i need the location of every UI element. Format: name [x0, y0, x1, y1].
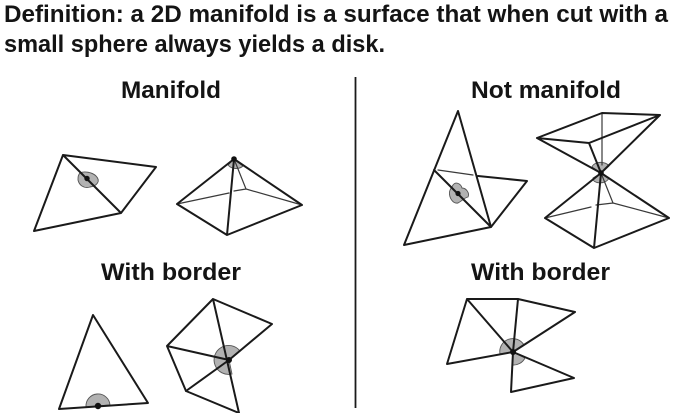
diagram: non-manifold double pyramid: [537, 113, 669, 248]
diagram: border fan mesh: [167, 299, 272, 413]
heading: With border, left: With border: [101, 259, 241, 286]
diagram: manifold flat mesh: [34, 155, 156, 231]
diagram: border non-manifold fan: [447, 299, 575, 392]
diagram: border triangle: [59, 315, 148, 409]
definition text: small sphere always yields a disk.: [4, 31, 385, 58]
definition text: [4, 1, 669, 58]
diagram: non-manifold triangles: [404, 111, 527, 245]
heading: Manifold: Manifold: [121, 77, 221, 104]
heading: Not manifold: Not manifold: [471, 77, 621, 104]
heading: With border, right: With border: [471, 259, 610, 286]
diagram: manifold pyramid: [177, 156, 302, 235]
definition text: Definition: a 2D manifold is a surface that when cut with a: [4, 1, 669, 28]
center divider: [354, 77, 356, 408]
